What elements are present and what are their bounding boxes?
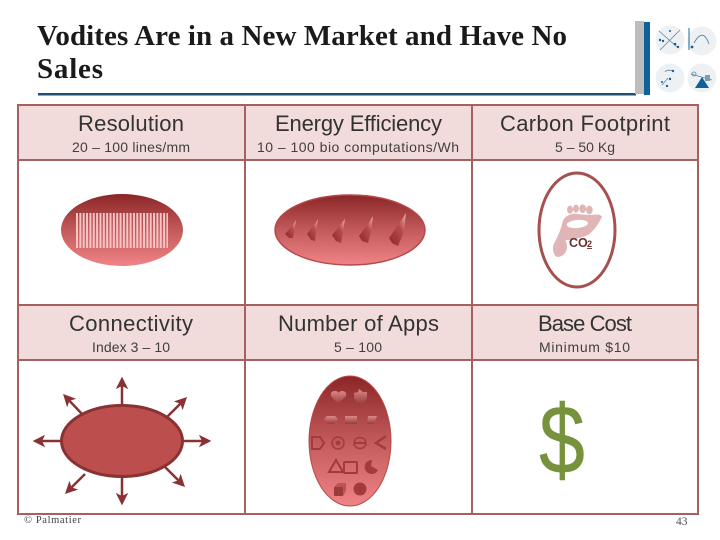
connectivity header: Index 3 – 10 [92, 339, 170, 355]
resolution header: Resolution [78, 111, 184, 136]
icon: app shapes in oval [309, 376, 391, 506]
energy header: Energy Efficiency [275, 111, 442, 136]
panel: carbon footprint [472, 105, 698, 287]
apps header [245, 305, 472, 360]
icon: shards in oval [275, 195, 425, 265]
resolution header [18, 105, 245, 160]
carbon header: Carbon Footprint [500, 111, 670, 136]
copyright: © Palmatier [24, 515, 82, 526]
panel: energy efficiency [245, 105, 472, 265]
title: Sales [37, 53, 103, 85]
table grid [18, 105, 698, 514]
icon: footprint CO2 [539, 173, 615, 287]
panel: connectivity [18, 305, 245, 496]
icon: dollar sign: $ [539, 387, 585, 495]
connectivity header [18, 305, 245, 360]
page number: 43 [676, 516, 688, 528]
cost header: Minimum $10 [539, 339, 630, 355]
icon: footprint CO2: 2 [587, 239, 592, 249]
icon: footprint CO2: CO [569, 236, 588, 250]
title [37, 20, 567, 85]
panel: resolution [18, 105, 245, 266]
energy header: 10 – 100 bio computations/Wh [257, 139, 459, 155]
panel: number of apps [245, 305, 472, 506]
resolution header: 20 – 100 lines/mm [72, 139, 190, 155]
logo: bars and analytics icons [635, 21, 716, 95]
header rule [38, 93, 636, 96]
apps header: 5 – 100 [334, 339, 382, 355]
icon: striped lines in oval [61, 194, 183, 266]
apps header: Number of Apps [278, 311, 439, 336]
cost header [472, 305, 698, 360]
energy header [245, 105, 472, 160]
cost header: Base Cost [538, 311, 632, 336]
icon: oval with radiating arrows [42, 386, 202, 496]
carbon header [472, 105, 698, 160]
carbon header: 5 – 50 Kg [555, 139, 615, 155]
title: Vodites Are in a New Market and Have No [37, 20, 567, 52]
connectivity header: Connectivity [69, 311, 193, 336]
panel: base cost [472, 305, 698, 495]
